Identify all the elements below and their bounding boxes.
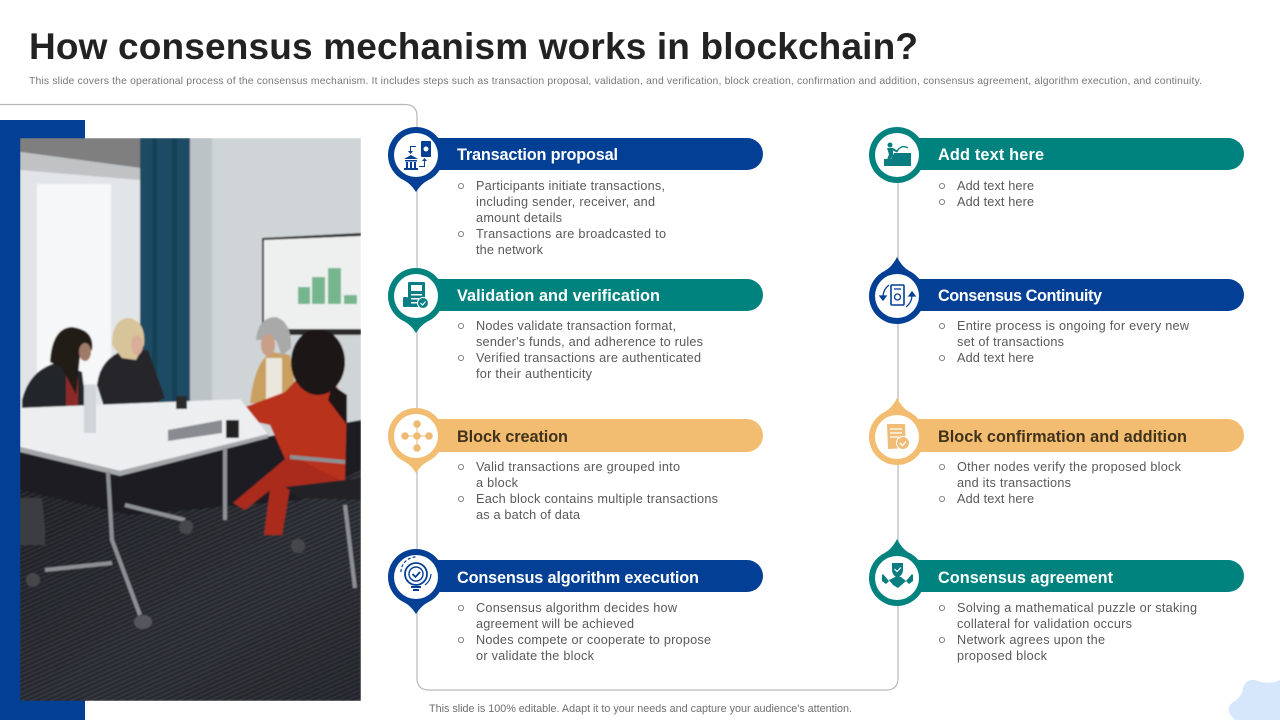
subtitle description: This slide covers the operational process of the consensus mechanism. It includes steps such as transaction proposal, validation, and verification, block creation, confirmation and addition, consensus agreement, algorithm execution, and continuity. <box>29 76 1202 87</box>
bullet list: Consensus algorithm decides how <box>476 601 678 615</box>
bullet list <box>939 319 1190 365</box>
bullet list: Add text here <box>957 195 1034 209</box>
bullet list: amount details <box>476 211 562 225</box>
bullet list: Other nodes verify the proposed block <box>957 460 1182 474</box>
bullet list: Nodes compete or cooperate to propose <box>476 633 711 647</box>
bullet list <box>458 601 711 663</box>
bullet list: Add text here <box>957 351 1034 365</box>
icon: connected nodes <box>401 420 433 452</box>
bullet list <box>458 179 666 257</box>
pin and header bar <box>388 268 763 333</box>
bullet list: the network <box>476 243 544 257</box>
bullet list: Entire process is ongoing for every new <box>957 319 1190 333</box>
bullet list: Network agrees upon the <box>957 633 1105 647</box>
bullet list: agreement will be achieved <box>476 617 634 631</box>
bullet list <box>458 460 718 522</box>
bullet list: collateral for validation occurs <box>957 617 1132 631</box>
connector line <box>0 104 898 690</box>
bullet list: proposed block <box>957 649 1048 663</box>
bullet list: set of transactions <box>957 335 1064 349</box>
blue accent block <box>0 120 85 720</box>
decorative cloud <box>1229 680 1280 720</box>
bullet list <box>939 179 1034 209</box>
pin and header bar <box>869 127 1244 183</box>
step: consensus algorithm execution <box>388 549 763 663</box>
bullet list: Participants initiate transactions, <box>476 179 665 193</box>
icon: document with check badge <box>887 424 910 450</box>
photo: team meeting <box>20 138 361 701</box>
bullet list: Nodes validate transaction format, <box>476 319 676 333</box>
step: transaction proposal <box>388 127 763 257</box>
step: block confirmation and addition <box>869 398 1244 506</box>
step: validation and verification <box>388 268 763 381</box>
step: block creation <box>388 408 763 522</box>
bullet list: or validate the block <box>476 649 595 663</box>
icon: light bulb with check <box>401 557 431 590</box>
bullet list: sender's funds, and adherence to rules <box>476 335 703 349</box>
heading: Consensus Continuity <box>938 287 1102 305</box>
bullet list: Verified transactions are authenticated <box>476 351 701 365</box>
footer note: This slide is 100% editable. Adapt it to your needs and capture your audience's attention. <box>429 703 852 715</box>
icon: document check <box>403 282 428 308</box>
icon: person climbing step <box>884 142 911 166</box>
pin and header bar <box>869 398 1244 465</box>
bullet list <box>458 319 703 381</box>
step: consensus continuity <box>869 257 1244 365</box>
icon: bank and phone transfer <box>404 141 431 170</box>
pin and header bar <box>869 257 1244 324</box>
bullet list <box>939 601 1197 663</box>
pin and header bar <box>388 549 763 614</box>
heading: Block confirmation and addition <box>938 428 1187 446</box>
bullet list: a block <box>476 476 519 490</box>
heading: Consensus agreement <box>938 569 1114 587</box>
heading: Consensus algorithm execution <box>457 569 699 587</box>
bullet list: Solving a mathematical puzzle or staking <box>957 601 1197 615</box>
pin and header bar <box>388 408 763 473</box>
title: How consensus mechanism works in blockchain? <box>29 26 918 67</box>
bullet list: and its transactions <box>957 476 1071 490</box>
heading: Validation and verification <box>457 287 660 305</box>
bullet list: as a batch of data <box>476 508 581 522</box>
bullet list: Transactions are broadcasted to <box>476 227 666 241</box>
bullet list: Add text here <box>957 492 1034 506</box>
bullet list <box>939 460 1182 506</box>
heading: Transaction proposal <box>457 146 618 164</box>
step: add text here <box>869 127 1244 209</box>
pin and header bar <box>388 127 763 192</box>
icon: clipboard in cycle arrows <box>880 285 915 307</box>
heading: Block creation <box>457 428 568 446</box>
bullet list: including sender, receiver, and <box>476 195 655 209</box>
bullet list: Each block contains multiple transactions <box>476 492 718 506</box>
pin and header bar <box>869 539 1244 606</box>
bullet list: Valid transactions are grouped into <box>476 460 680 474</box>
heading: Add text here <box>938 146 1044 164</box>
icon: handshake with shield <box>882 563 913 588</box>
bullet list: for their authenticity <box>476 367 593 381</box>
bullet list: Add text here <box>957 179 1034 193</box>
step: consensus agreement <box>869 539 1244 663</box>
